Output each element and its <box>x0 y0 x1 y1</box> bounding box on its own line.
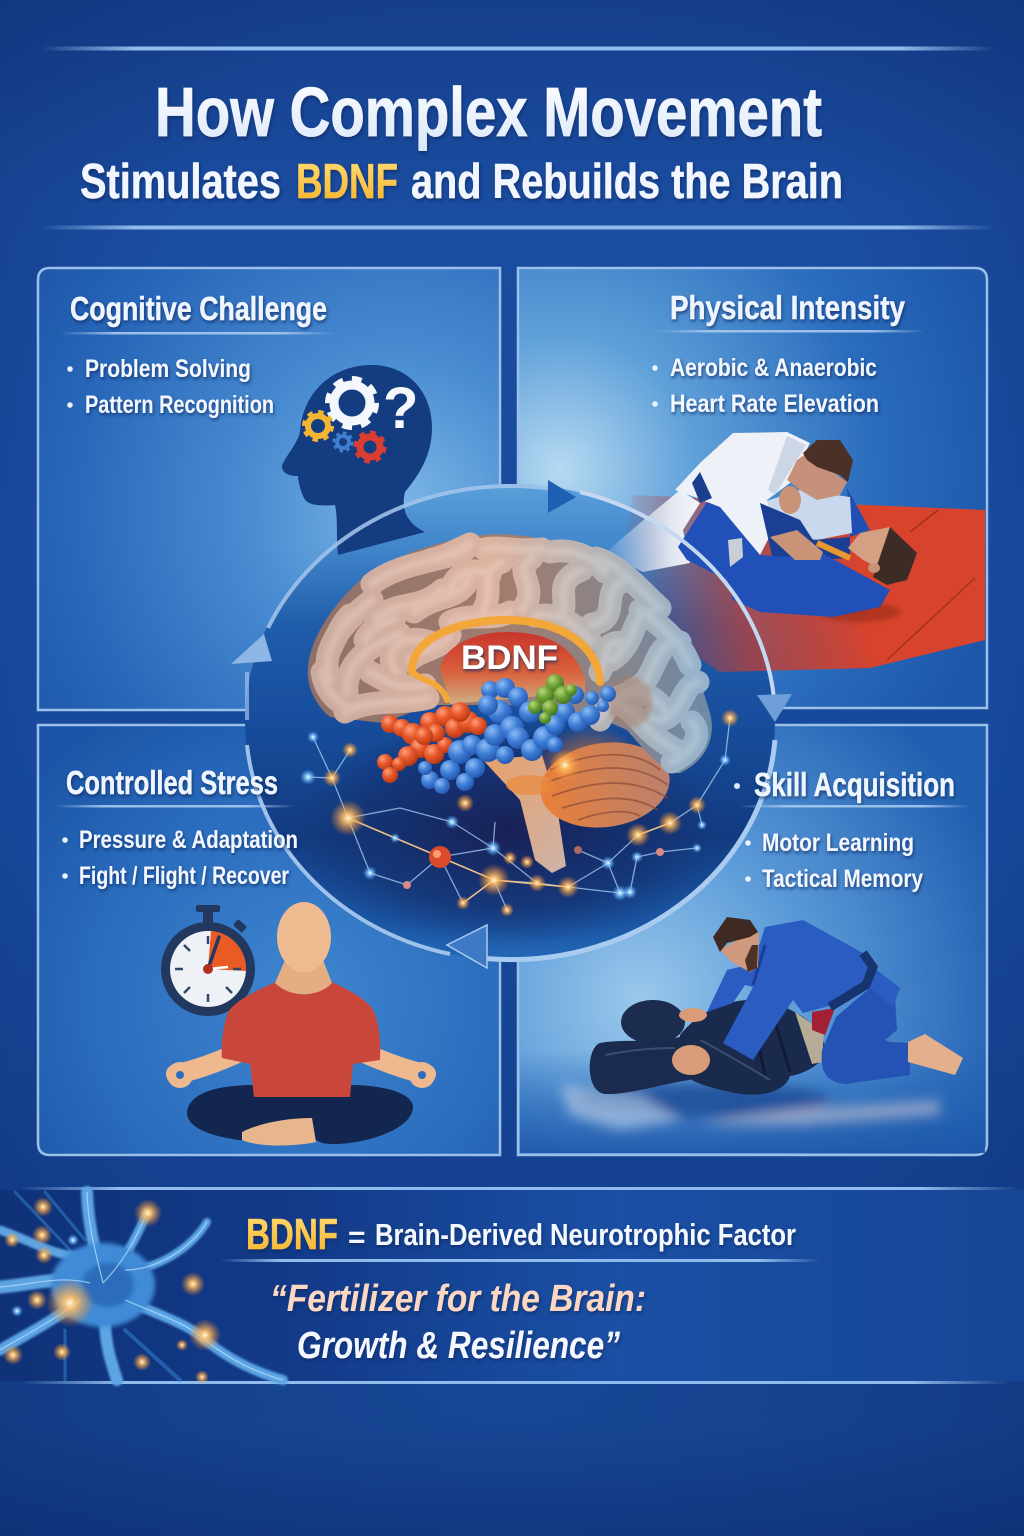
bullet list: physical <box>652 354 879 418</box>
cerebrum <box>308 534 712 773</box>
bullet list: stress <box>62 826 298 890</box>
neural network constellation <box>300 709 739 917</box>
BDNF window <box>412 620 600 704</box>
bullet list: skill <box>745 829 923 893</box>
panel: physical intensity <box>518 268 987 708</box>
white gear <box>328 379 376 427</box>
panel: controlled stress <box>38 725 500 1155</box>
definition text <box>246 1210 796 1259</box>
dummy <box>590 1000 825 1095</box>
title line 2: BDNF <box>296 155 398 209</box>
banner: BDNF definition <box>0 1187 1024 1384</box>
title line 2 <box>80 155 843 209</box>
bullet list: cognitive: Pattern Recognition <box>85 391 274 419</box>
quote: “Fertilizer for the Brain: <box>270 1278 646 1320</box>
circular cycle background <box>245 484 775 960</box>
title line 1: How Complex Movement <box>155 73 822 151</box>
white gi fighter <box>675 432 853 555</box>
definition text: = <box>348 1221 366 1254</box>
quote <box>270 1278 646 1367</box>
title block <box>40 46 995 230</box>
bullet list: stress: Pressure & Adaptation <box>79 826 298 854</box>
title line 2: and Rebuilds the Brain <box>411 155 843 209</box>
text: cognitive challenge <box>60 290 335 419</box>
panel: cognitive challenge <box>38 268 500 710</box>
icon: stopwatch <box>161 905 255 1016</box>
heading: physical intensity: Physical Intensity <box>670 289 906 326</box>
bullet list: cognitive <box>67 355 274 419</box>
icon: neuron <box>0 1192 283 1384</box>
illustration: brain with BDNF <box>308 534 712 873</box>
arrow: to cognitive <box>231 634 450 954</box>
heading: controlled stress: Controlled Stress <box>66 764 278 801</box>
BDNF protein molecule <box>377 674 616 794</box>
photo: jiu-jitsu sparring <box>605 432 985 672</box>
text: controlled stress <box>55 764 298 890</box>
quote: Growth & Resilience” <box>297 1325 620 1367</box>
title line 2: Stimulates <box>80 155 281 209</box>
panel: skill acquisition <box>518 725 987 1155</box>
definition text: Brain-Derived Neurotrophic Factor <box>375 1217 796 1252</box>
blue gear <box>334 433 352 451</box>
icon: head with gears <box>282 365 432 555</box>
heading: skill acquisition: Skill Acquisition <box>754 766 955 803</box>
yellow gear <box>304 412 332 440</box>
photo: grappling dummy drill <box>520 917 985 1153</box>
cycle arrows <box>231 480 792 968</box>
brainstem <box>483 755 566 873</box>
bullet list: physical: Heart Rate Elevation <box>670 390 879 418</box>
blue gi fighter <box>678 486 917 617</box>
hazy glow behind the synapses <box>300 715 720 945</box>
skin: head, hands, foot <box>672 917 963 1075</box>
BDNF window: BDNF <box>461 639 558 677</box>
question mark: ? <box>383 376 418 441</box>
bullet list: stress: Fight / Flight / Recover <box>79 862 289 890</box>
bullet list: skill: Motor Learning <box>762 829 914 857</box>
arrow: to skill <box>580 492 792 722</box>
definition text: BDNF <box>246 1210 338 1259</box>
arrow: to physical <box>268 480 576 628</box>
figure: meditating person <box>167 902 435 1146</box>
blue gi <box>707 920 910 1084</box>
heading: cognitive challenge: Cognitive Challenge <box>70 290 327 327</box>
bullet list: cognitive: Problem Solving <box>85 355 251 383</box>
bullet list: skill: Tactical Memory <box>762 865 923 893</box>
text: physical intensity <box>652 289 925 418</box>
cerebellum <box>506 734 675 836</box>
text: skill acquisition <box>734 766 970 893</box>
arrow: to stress <box>447 740 775 968</box>
bullet list: physical: Aerobic & Anaerobic <box>670 354 877 382</box>
red gear <box>356 432 384 462</box>
